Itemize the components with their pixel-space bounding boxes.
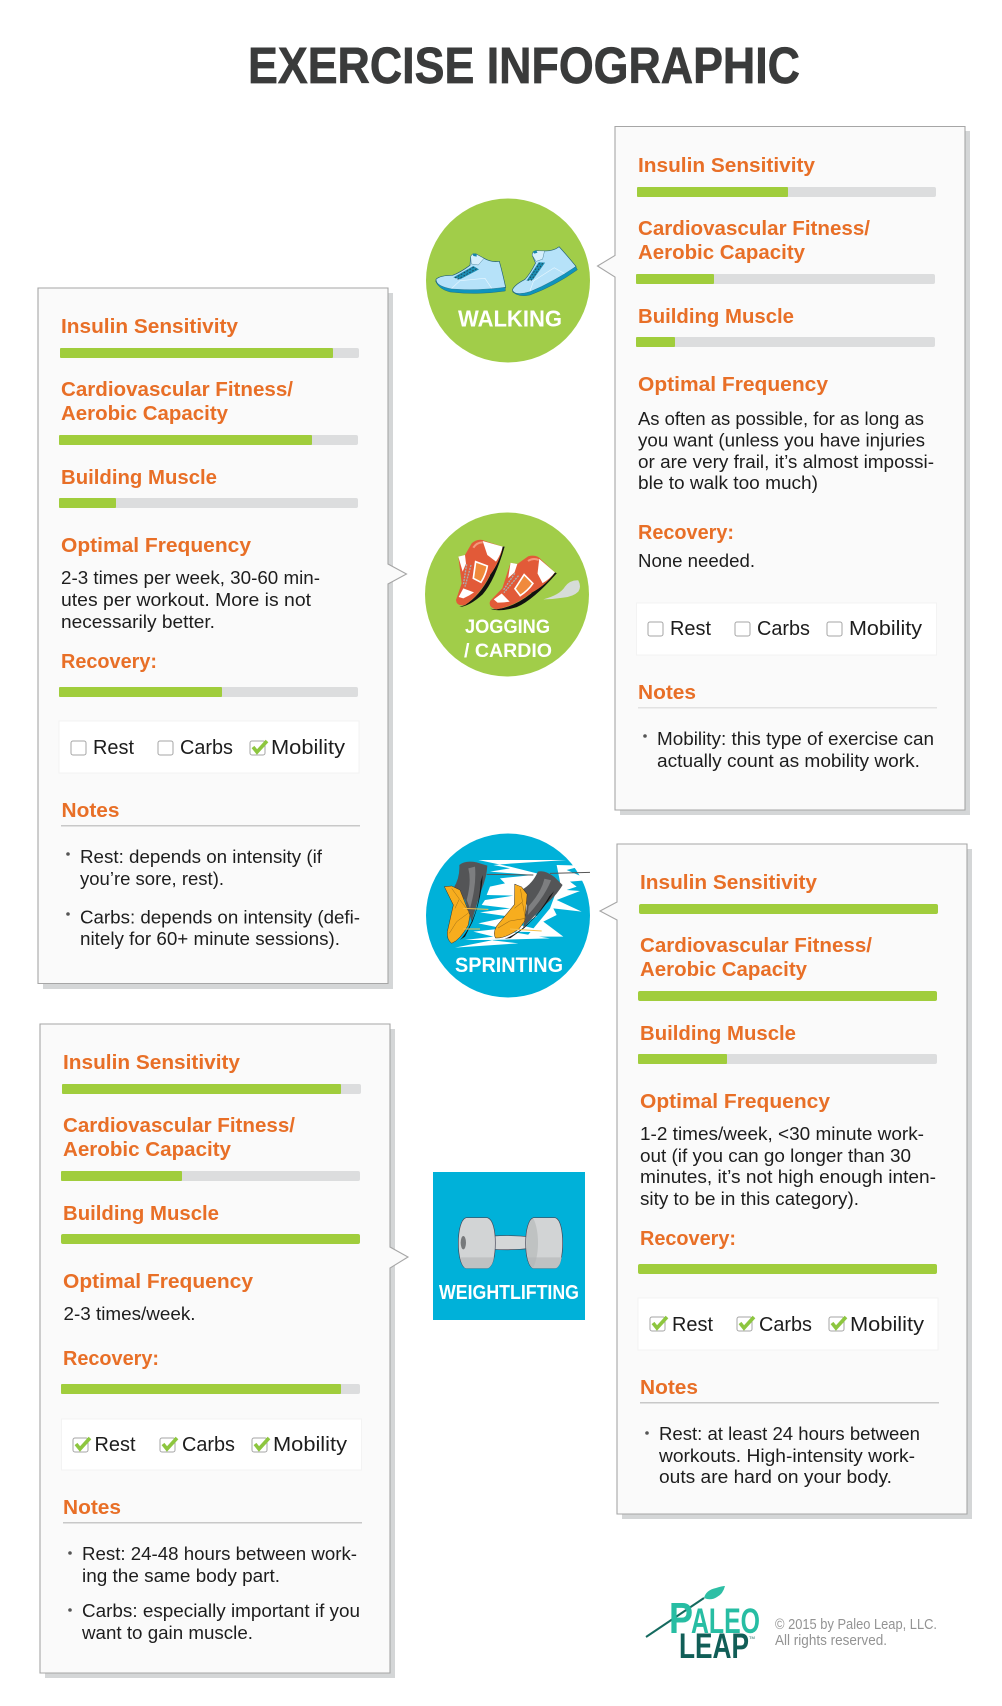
heading: cardiovascular fitness [638, 218, 870, 264]
notes list: Carbs: depends on intensity (defi- [80, 908, 360, 928]
bar: cardiovascular fitness [61, 1171, 360, 1181]
heading: cardiovascular fitness: Cardiovascular Fitness/ [640, 935, 872, 957]
heading: cardiovascular fitness: Aerobic Capacity [638, 242, 806, 264]
panel background with pointer [40, 1024, 408, 1678]
bar: insulin sensitivity [60, 348, 359, 358]
notes list [68, 1544, 360, 1643]
heading: cardiovascular fitness: Aerobic Capacity [61, 403, 229, 425]
bar: recovery [59, 687, 358, 697]
text: optimal frequency: sity to be in this category). [640, 1189, 859, 1209]
icon: sprinting: SPRINTING [455, 954, 563, 977]
notes list: ing the same body part. [82, 1566, 280, 1586]
panel: weightlifting [40, 1024, 408, 1678]
text: optimal frequency [638, 409, 934, 493]
heading: cardiovascular fitness: Cardiovascular Fitness/ [61, 379, 293, 401]
copyright: All rights reserved. [775, 1633, 887, 1649]
checklist [59, 721, 359, 773]
panel background with pointer [600, 844, 972, 1519]
logo: paleo leap [646, 1586, 760, 1666]
heading: insulin sensitivity: Insulin Sensitivity [61, 316, 239, 338]
text: optimal frequency: necessarily better. [61, 612, 215, 632]
text: optimal frequency: you want (unless you have injuries [638, 430, 925, 450]
notes list: Mobility: this type of exercise can [657, 729, 934, 749]
text: optimal frequency: or are very frail, it’s almost impossi- [638, 452, 934, 472]
notes list: Rest: depends on intensity (if [80, 847, 323, 867]
text: optimal frequency [61, 568, 320, 632]
title: EXERCISE INFOGRAPHIC [248, 37, 800, 94]
bar: insulin sensitivity [637, 187, 936, 197]
text: optimal frequency: ble to walk too much) [638, 473, 818, 493]
text: optimal frequency: out (if you can go longer than 30 [640, 1146, 911, 1166]
heading: optimal frequency: Optimal Frequency [638, 374, 829, 396]
icon: weightlifting [433, 1172, 585, 1320]
text: optimal frequency: 2-3 times/week. [64, 1304, 196, 1324]
heading: cardiovascular fitness: Aerobic Capacity [63, 1139, 232, 1161]
checklist: Mobility [273, 1433, 348, 1456]
bar: building muscle [59, 498, 358, 508]
heading: building muscle: Building Muscle [61, 467, 217, 489]
logo: paleo leap: ALEO [691, 1602, 760, 1641]
bar: cardiovascular fitness [638, 991, 937, 1001]
heading: cardiovascular fitness: Cardiovascular Fitness/ [638, 218, 870, 240]
heading: recovery: Recovery: [61, 651, 157, 673]
text: optimal frequency [640, 1124, 936, 1209]
heading: insulin sensitivity: Insulin Sensitivity [63, 1052, 241, 1074]
logo: paleo leap: LEAP [679, 1627, 749, 1666]
text: optimal frequency: 1-2 times/week, <30 minute work- [640, 1124, 924, 1144]
heading: recovery: Recovery: [63, 1348, 159, 1370]
icon: walking [426, 198, 590, 362]
heading: optimal frequency: Optimal Frequency [63, 1271, 254, 1293]
heading: cardiovascular fitness: Cardiovascular Fitness/ [63, 1115, 295, 1137]
panel: jogging [38, 288, 406, 989]
icon: jogging: JOGGING [465, 616, 550, 638]
panel background with pointer [38, 288, 406, 989]
checklist [638, 1298, 938, 1350]
checklist: Carbs [759, 1313, 812, 1336]
checklist: Mobility [850, 1313, 925, 1336]
heading: cardiovascular fitness [640, 935, 872, 981]
checklist: Rest [93, 736, 134, 759]
checklist: Rest [670, 617, 711, 640]
notes list: Rest: 24-48 hours between work- [82, 1544, 357, 1564]
checklist: Rest [672, 1313, 713, 1336]
heading: building muscle: Building Muscle [640, 1023, 796, 1045]
panel: walking [598, 126, 970, 815]
heading: notes: Notes [638, 682, 696, 704]
heading: recovery: Recovery: [640, 1228, 736, 1250]
notes list [66, 847, 360, 949]
bar: cardiovascular fitness [636, 274, 935, 284]
heading: insulin sensitivity: Insulin Sensitivity [640, 872, 818, 894]
checklist: Carbs [757, 617, 810, 640]
notes list: want to gain muscle. [81, 1623, 253, 1643]
checklist: Rest [94, 1433, 136, 1456]
logo: paleo leap: P [669, 1594, 693, 1643]
heading: building muscle: Building Muscle [638, 306, 794, 328]
text: optimal frequency: utes per workout. More is not [61, 590, 311, 610]
icon: jogging [425, 512, 589, 676]
heading: notes: Notes [62, 800, 120, 822]
logo: paleo leap: TM [749, 1635, 755, 1640]
heading: building muscle: Building Muscle [63, 1203, 219, 1225]
notes list [643, 729, 934, 771]
notes list: Rest: at least 24 hours between [659, 1424, 920, 1444]
bar: cardiovascular fitness [59, 435, 358, 445]
checklist: Mobility [849, 617, 923, 640]
bar: recovery [638, 1264, 937, 1274]
panel: sprinting [600, 844, 972, 1519]
text: recovery: None needed. [638, 551, 755, 571]
heading: optimal frequency: Optimal Frequency [640, 1091, 831, 1113]
bar: building muscle [636, 337, 935, 347]
heading: optimal frequency: Optimal Frequency [61, 535, 252, 557]
notes list: you’re sore, rest). [80, 869, 224, 889]
bar: building muscle [638, 1054, 937, 1064]
heading: notes: Notes [640, 1377, 698, 1399]
icon: jogging: / CARDIO [464, 640, 552, 662]
notes list: actually count as mobility work. [657, 751, 920, 771]
copyright: © 2015 by Paleo Leap, LLC. [775, 1617, 937, 1633]
bar: building muscle [61, 1234, 360, 1244]
checklist [636, 603, 936, 655]
heading: insulin sensitivity: Insulin Sensitivity [638, 155, 816, 177]
icon: weightlifting: WEIGHTLIFTING [439, 1282, 579, 1304]
checklist [62, 1419, 362, 1470]
text: optimal frequency: As often as possible, for as long as [638, 409, 924, 429]
heading: cardiovascular fitness: Aerobic Capacity [640, 959, 808, 981]
bar: insulin sensitivity [62, 1084, 361, 1094]
bar: recovery [61, 1384, 360, 1394]
notes list [645, 1424, 920, 1487]
heading: cardiovascular fitness [61, 379, 293, 425]
heading: notes: Notes [63, 1497, 121, 1519]
checklist: Mobility [271, 736, 346, 759]
copyright [775, 1617, 937, 1649]
bar: insulin sensitivity [639, 904, 938, 914]
text: optimal frequency: minutes, it’s not high enough inten- [640, 1167, 936, 1187]
notes list: Carbs: especially important if you [82, 1601, 360, 1621]
text: optimal frequency: 2-3 times per week, 30-60 min- [61, 568, 320, 588]
notes list: nitely for 60+ minute sessions). [80, 929, 340, 949]
icon: sprinting [426, 834, 590, 998]
panel background with pointer [598, 126, 970, 815]
icon: walking: WALKING [458, 306, 562, 332]
checklist: Carbs [182, 1433, 235, 1456]
notes list: outs are hard on your body. [659, 1467, 892, 1487]
notes list: workouts. High-intensity work- [658, 1446, 915, 1466]
checklist: Carbs [180, 736, 233, 759]
heading: cardiovascular fitness [63, 1115, 295, 1161]
heading: recovery: Recovery: [638, 522, 734, 544]
